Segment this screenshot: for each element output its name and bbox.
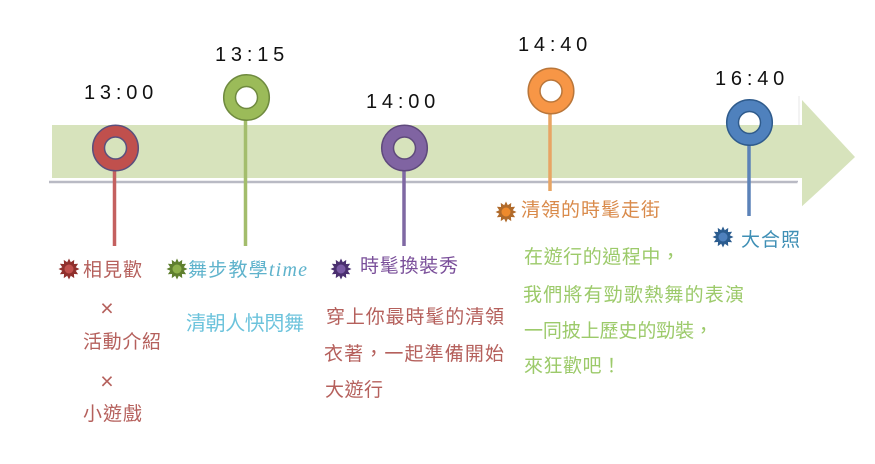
heading 時髦換裝秀: 時髦換裝秀 [360,255,458,277]
text: description: 我們將有勁歌熱舞的表演 [523,284,744,306]
text: description [324,306,504,401]
text: description: 穿上你最時髦的清領 [326,306,504,328]
icon: red star [58,258,80,280]
time label 14:00: 14:00 [366,91,440,113]
heading 清領的時髦走街: 清領的時髦走街 [521,199,660,221]
connector green [244,119,247,246]
ring red [98,131,132,165]
connector red [113,170,116,246]
timeline arrow [49,96,856,211]
time label 13:00: 13:00 [84,82,158,104]
text: description: 在遊行的過程中， [524,246,680,268]
panel: 時髦換裝秀 [324,255,504,401]
panel: 舞步教學 [166,258,307,335]
text: description: 衣著，一起準備開始 [324,343,504,365]
connector orange [548,113,552,191]
text: activity list [83,295,161,425]
icon: orange star [496,202,516,222]
text: description: 大遊行 [325,379,383,401]
icon: green star [166,258,188,280]
text: activity list: × [100,295,114,321]
ring orange [534,74,568,108]
marker: 13:15 [215,44,289,246]
time label 14:40: 14:40 [518,34,592,56]
text: activity list: × [100,368,114,394]
text: activity list: 小遊戲 [83,403,142,425]
ring purple [388,131,422,165]
ring blue [732,106,766,140]
heading 舞步教學time: 舞步教學time [188,259,307,281]
connector purple [402,170,406,246]
icon: blue star [712,226,734,248]
heading 大合照: 大合照 [741,229,800,251]
time label 13:15: 13:15 [215,44,289,66]
heading 相見歡: 相見歡 [83,259,142,281]
text: activity list: 活動介紹 [83,331,161,353]
connector blue [747,144,751,216]
panel: 清領的時髦走街 [496,199,744,377]
icon: purple star [330,258,352,280]
text: description [523,246,744,377]
marker: 14:40 [518,34,592,191]
marker: 14:00 [366,91,440,246]
marker: 16:40 [715,68,789,216]
marker: 13:00 [84,82,158,246]
time label 16:40: 16:40 [715,68,789,90]
panel: 大合照 [712,226,800,251]
text: 清朝人快閃舞: 清朝人快閃舞 [186,312,304,335]
text: description: 一同披上歷史的勁裝， [524,320,713,342]
panel: 相見歡 [58,258,161,425]
ring green [230,80,264,114]
text: description: 來狂歡吧！ [524,355,621,377]
